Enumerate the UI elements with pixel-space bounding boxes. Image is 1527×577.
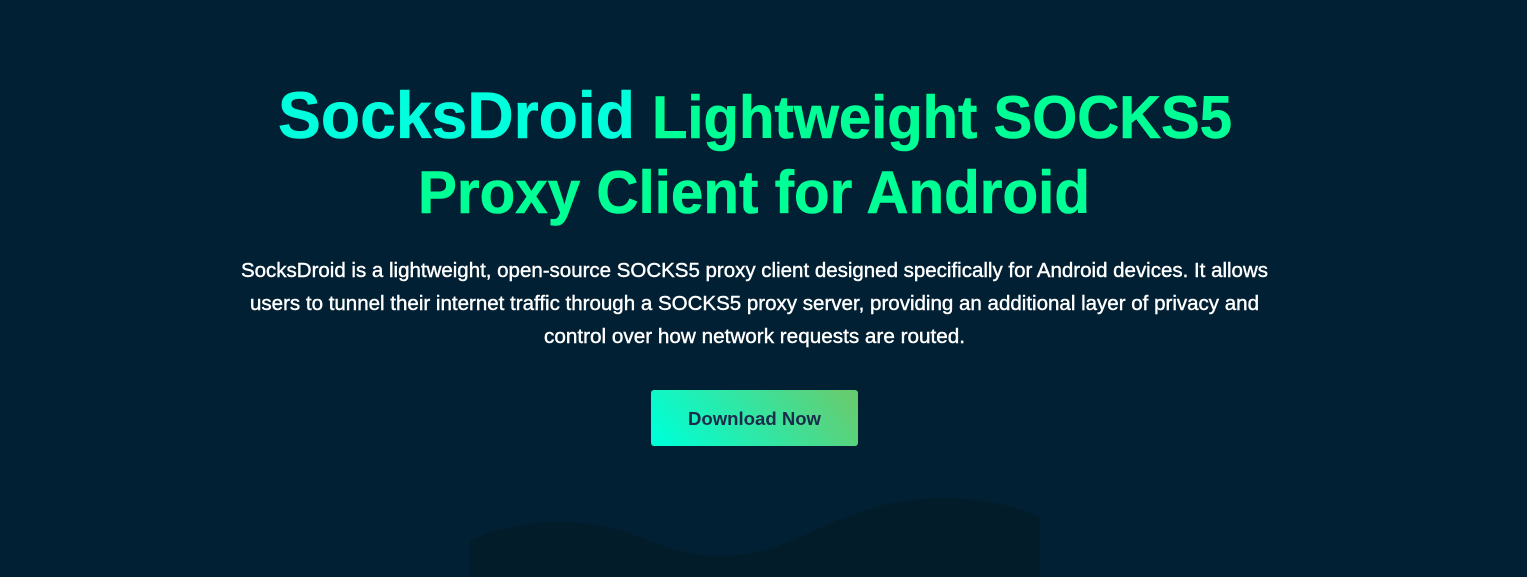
button label: Download Now — [688, 409, 822, 429]
background wave shape — [470, 498, 1040, 577]
description line three: control over how network requests are routed. — [544, 326, 965, 348]
description paragraph — [241, 260, 1268, 348]
title — [278, 78, 1232, 226]
description line one: SocksDroid is a lightweight, open-source SOCKS5 proxy client designed specifically for Android devices. It allows — [241, 260, 1268, 282]
download button — [651, 390, 858, 446]
title line one: Lightweight SOCKS5 — [652, 84, 1232, 151]
title line two: Proxy Client for Android — [418, 159, 1090, 226]
button background — [651, 390, 858, 446]
description line two: users to tunnel their internet traffic through a SOCKS5 proxy server, providing an additional layer of privacy and — [250, 293, 1259, 315]
title brand name: SocksDroid — [278, 78, 635, 152]
